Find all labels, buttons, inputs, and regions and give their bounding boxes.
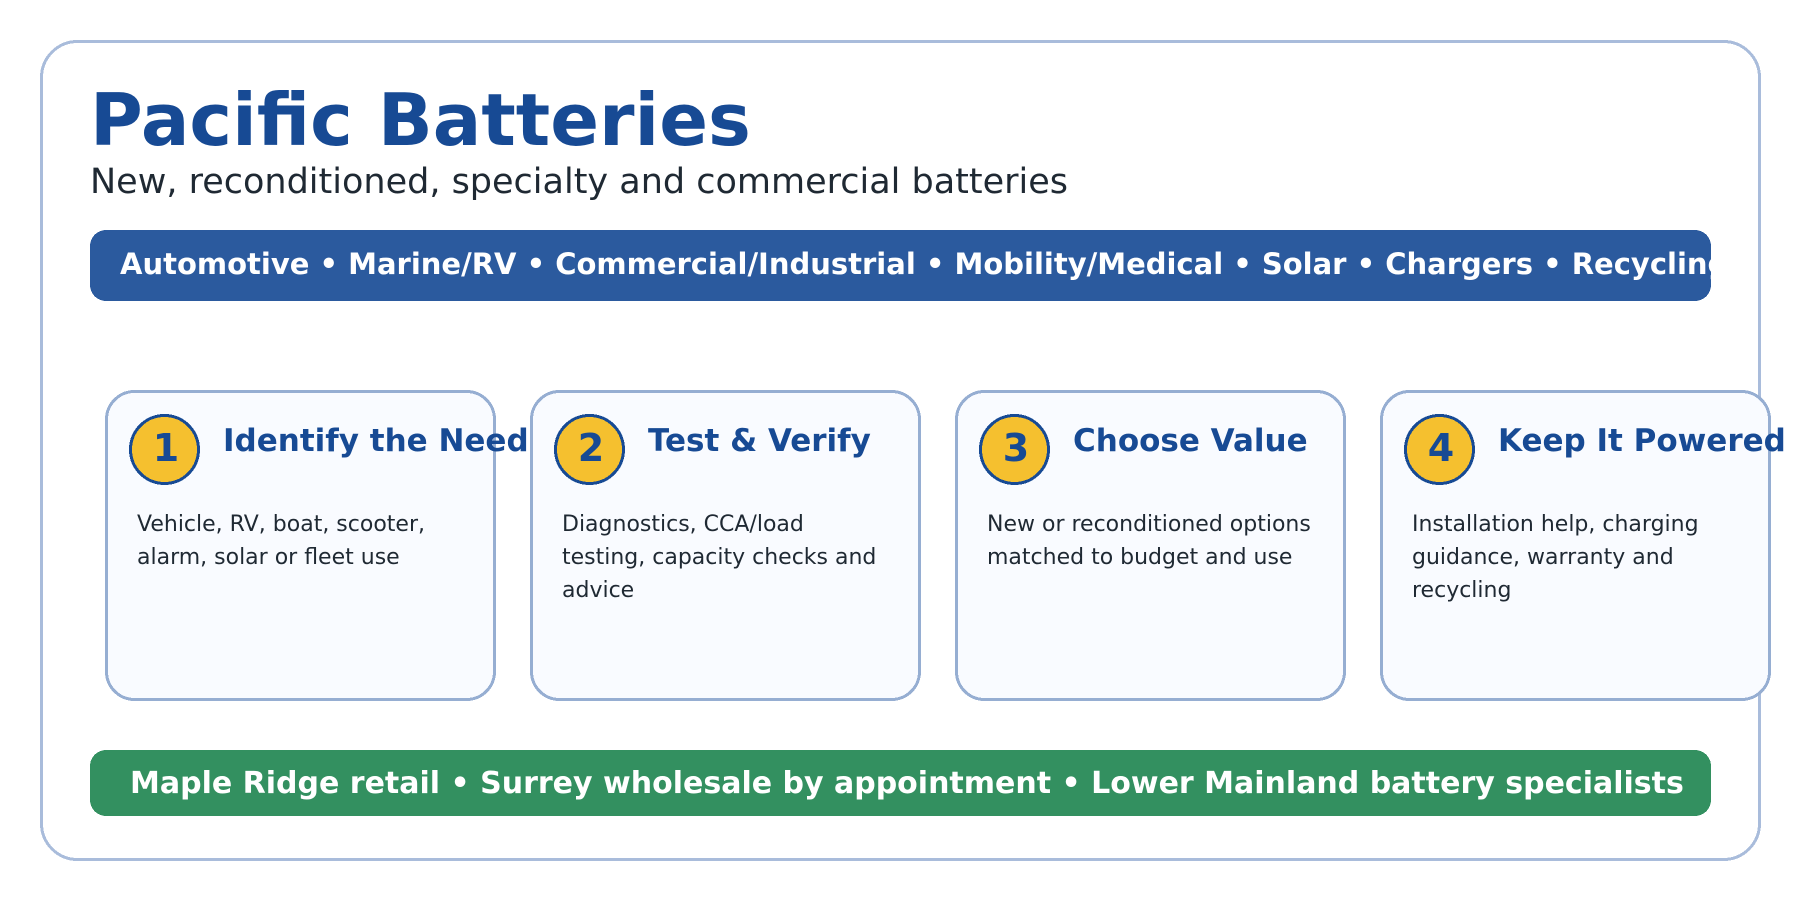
icon: step 3 badge: [980, 416, 1048, 484]
heading: step 4: Keep It Powered: [1498, 423, 1786, 459]
subtitle: New, reconditioned, specialty and commercial batteries: [90, 162, 1068, 202]
heading: step 2: Test & Verify: [648, 423, 871, 459]
panel: step 2: [532, 392, 920, 700]
banner: product categories: Automotive • Marine/RV • Commercial/Industrial • Mobility/Medical • Solar • Chargers • Recycling: [120, 247, 1728, 281]
title: Pacific Batteries: [90, 78, 751, 162]
heading: step 1: Identify the Need: [223, 423, 529, 459]
text: step 4: recycling: [1412, 578, 1511, 603]
text: step 3: New or reconditioned options: [987, 512, 1311, 537]
icon: step 1 badge: [130, 416, 198, 484]
text: step 2: testing, capacity checks and: [562, 545, 876, 570]
icon: step 4 badge: [1406, 416, 1474, 484]
heading: step 3: Choose Value: [1073, 423, 1308, 459]
banner: product categories: [90, 230, 1728, 301]
text: step 1: Vehicle, RV, boat, scooter,: [137, 512, 425, 537]
icon: step 2 badge: [556, 416, 624, 484]
icon: step 1 badge: 1: [153, 426, 179, 470]
icon: step 4 badge: 4: [1428, 426, 1454, 470]
text: step 2: Diagnostics, CCA/load: [562, 512, 804, 537]
text: step 4: guidance, warranty and: [1412, 545, 1674, 570]
panel: step 1: [106, 392, 529, 700]
banner: locations: [90, 750, 1711, 816]
banner: locations: Maple Ridge retail • Surrey wholesale by appointment • Lower Mainland battery specialists: [130, 766, 1684, 801]
text: step 2: advice: [562, 578, 634, 603]
icon: step 2 badge: 2: [578, 426, 604, 470]
icon: step 3 badge: 3: [1003, 426, 1029, 470]
text: step 3: matched to budget and use: [987, 545, 1292, 570]
panel: step 4: [1382, 392, 1786, 700]
panel: step 3: [956, 392, 1344, 700]
text: step 1: alarm, solar or fleet use: [137, 545, 400, 570]
text: step 4: Installation help, charging: [1412, 512, 1699, 537]
